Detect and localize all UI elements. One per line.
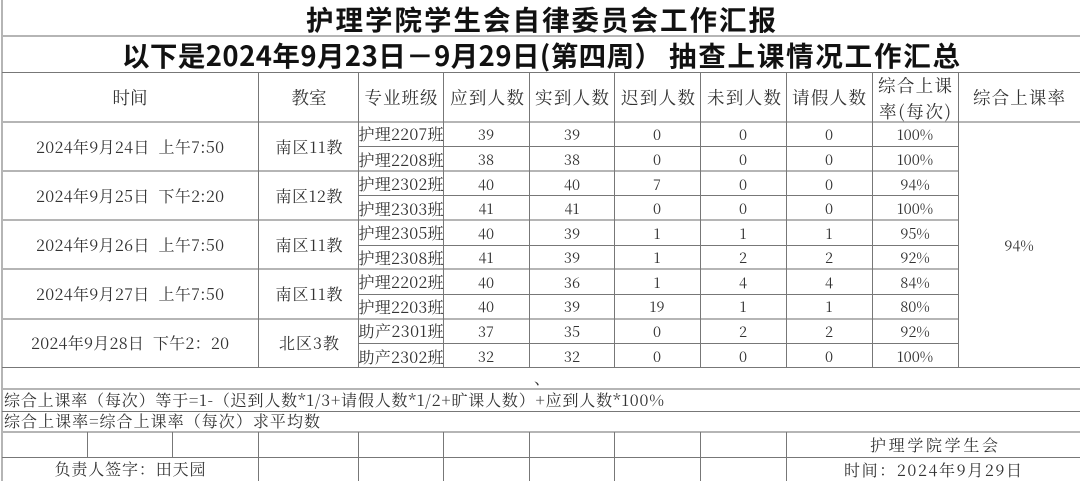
- table header: 迟到人数: [621, 85, 696, 110]
- formula note: overall rate: 综合上课率=综合上课率（每次）求平均数: [4, 409, 320, 432]
- overall attendance rate: 94%: [1004, 235, 1034, 256]
- class rows: 护理2308班: [358, 246, 444, 269]
- class rows: 0: [653, 321, 661, 342]
- class rows: 100%: [897, 346, 933, 367]
- class rows: [358, 122, 933, 368]
- class rows: 38: [478, 149, 494, 170]
- date and classroom column: 南区12教: [276, 184, 342, 207]
- subtitle: 抽查上课情况工作汇总: [669, 34, 960, 74]
- class rows: 0: [739, 124, 747, 145]
- signature: 负责人签字：田天园: [54, 457, 206, 480]
- table header: 综合上课: [878, 73, 952, 98]
- class rows: 护理2203班: [358, 295, 444, 318]
- class rows: 护理2305班: [358, 221, 444, 244]
- class rows: 0: [739, 198, 747, 219]
- class rows: 84%: [900, 272, 930, 293]
- class rows: 2: [739, 321, 747, 342]
- class rows: 95%: [900, 223, 930, 244]
- date and classroom column: 南区11教: [276, 233, 342, 256]
- class rows: 0: [739, 346, 747, 367]
- class rows: 2: [739, 247, 747, 268]
- class rows: 38: [564, 149, 580, 170]
- date and classroom column: 2024年9月27日 上午7:50: [36, 282, 224, 305]
- subtitle: [122, 34, 960, 74]
- date and classroom column: 2024年9月24日 上午7:50: [36, 135, 224, 158]
- date and classroom column: [31, 135, 342, 354]
- table header: 时间: [112, 85, 148, 110]
- class rows: 1: [826, 223, 833, 244]
- class rows: 40: [478, 174, 494, 195]
- table header: 应到人数: [450, 85, 524, 110]
- class rows: 36: [564, 272, 580, 293]
- class rows: 2: [825, 321, 833, 342]
- class rows: 41: [565, 198, 580, 219]
- class rows: 39: [564, 223, 580, 244]
- class rows: 1: [654, 223, 661, 244]
- class rows: 37: [478, 321, 494, 342]
- class rows: 0: [653, 198, 661, 219]
- table header: 率(每次): [879, 99, 951, 124]
- date and classroom column: 2024年9月25日 下午2:20: [36, 184, 224, 207]
- date and classroom column: 北区3教: [279, 331, 339, 354]
- class rows: 39: [478, 124, 494, 145]
- class rows: 0: [739, 174, 747, 195]
- table header: 专业班级: [364, 85, 438, 110]
- class rows: 100%: [897, 149, 933, 170]
- class rows: 39: [564, 296, 580, 317]
- class rows: 32: [478, 346, 494, 367]
- class rows: 0: [653, 124, 661, 145]
- report date: 时间：2024年9月29日: [844, 458, 1022, 481]
- class rows: 0: [825, 346, 833, 367]
- class rows: 2: [825, 247, 833, 268]
- class rows: 40: [478, 296, 494, 317]
- class rows: 80%: [900, 296, 930, 317]
- class rows: 1: [654, 272, 661, 293]
- class rows: 1: [826, 296, 833, 317]
- class rows: 35: [564, 321, 580, 342]
- table header: 教室: [292, 85, 326, 110]
- class rows: 41: [479, 247, 494, 268]
- class rows: 32: [564, 346, 580, 367]
- organization name: 护理学院学生会: [870, 433, 998, 456]
- class rows: 92%: [900, 321, 930, 342]
- class rows: 40: [478, 223, 494, 244]
- class rows: 4: [825, 272, 833, 293]
- class rows: 助产2302班: [358, 345, 444, 368]
- class rows: 0: [739, 149, 747, 170]
- table header: 请假人数: [792, 85, 866, 110]
- date and classroom column: 南区11教: [276, 135, 342, 158]
- class rows: 0: [825, 124, 833, 145]
- table header: [112, 73, 1065, 124]
- table header: 未到人数: [707, 85, 782, 110]
- class rows: 40: [478, 272, 494, 293]
- class rows: 1: [740, 223, 747, 244]
- class rows: 4: [739, 272, 747, 293]
- class rows: 1: [654, 247, 661, 268]
- class rows: 0: [653, 346, 661, 367]
- class rows: 40: [564, 174, 580, 195]
- table header: 实到人数: [535, 85, 610, 110]
- formula note: per-session rate: 综合上课率（每次）等于=1-（迟到人数*1/3+请假人数*1/2+旷课人数）+应到人数*100%: [4, 388, 664, 411]
- date and classroom column: 南区11教: [276, 282, 342, 305]
- class rows: 助产2301班: [358, 319, 444, 342]
- class rows: 7: [653, 174, 661, 195]
- class rows: 护理2303班: [358, 197, 444, 220]
- class rows: 护理2208班: [358, 148, 444, 171]
- class rows: 护理2302班: [358, 172, 444, 195]
- class rows: 1: [740, 296, 747, 317]
- class rows: 100%: [897, 124, 933, 145]
- stray mark: 、: [534, 366, 550, 389]
- class rows: 94%: [900, 174, 930, 195]
- class rows: 39: [564, 247, 580, 268]
- class rows: 41: [479, 198, 494, 219]
- class rows: 19: [650, 296, 664, 317]
- class rows: 护理2202班: [358, 270, 444, 293]
- subtitle: 以下是2024年9月23日－9月29日(第四周）: [122, 34, 662, 74]
- class rows: 0: [825, 198, 833, 219]
- class rows: 护理2207班: [358, 122, 444, 145]
- date and classroom column: 2024年9月28日 下午2：20: [31, 331, 229, 354]
- class rows: 0: [825, 149, 833, 170]
- class rows: 92%: [900, 247, 930, 268]
- class rows: 0: [825, 174, 833, 195]
- class rows: 0: [653, 149, 661, 170]
- date and classroom column: 2024年9月26日 上午7:50: [36, 233, 224, 256]
- table header: 综合上课率: [973, 85, 1065, 110]
- class rows: 100%: [897, 198, 933, 219]
- class rows: 39: [564, 124, 580, 145]
